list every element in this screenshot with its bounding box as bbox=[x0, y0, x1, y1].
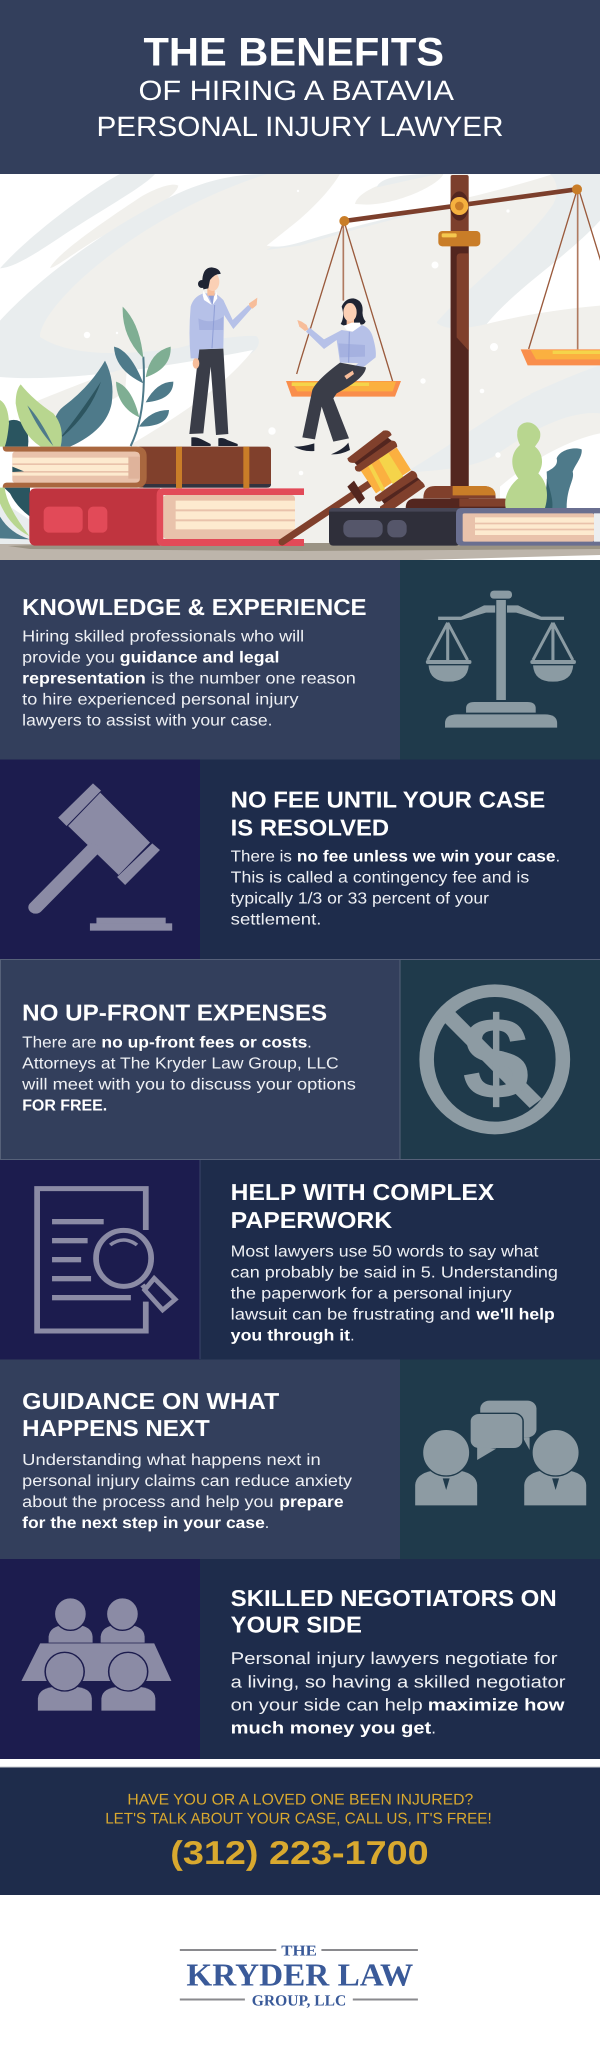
call to action text bbox=[105, 1791, 492, 1827]
body text: There is bbox=[231, 849, 292, 866]
body text bbox=[231, 1244, 558, 1345]
body text: about the process and help you bbox=[22, 1494, 274, 1511]
body text: Understanding what happens next in bbox=[22, 1452, 321, 1469]
body text: settlement. bbox=[231, 912, 321, 929]
body text: . bbox=[307, 1035, 312, 1052]
icon: scales bbox=[426, 591, 576, 728]
icon: negotiation table bbox=[21, 1598, 171, 1711]
logo bbox=[180, 1944, 418, 2009]
book stack: black book bbox=[329, 508, 600, 546]
body text: FOR FREE. bbox=[22, 1098, 107, 1115]
body text: for the next step in your case bbox=[22, 1515, 265, 1532]
body text: Hiring skilled professionals who will bbox=[22, 629, 304, 646]
phone number: (312) 223-1700 bbox=[170, 1834, 429, 1871]
standing woman bbox=[189, 267, 257, 446]
icon: two people talking bbox=[415, 1401, 586, 1505]
heading: YOUR SIDE bbox=[231, 1612, 362, 1638]
body text: . bbox=[265, 1515, 269, 1532]
section 3 panel: no up-front expenses bbox=[0, 960, 600, 1160]
body text: maximize how bbox=[428, 1695, 565, 1714]
illustration: lawyers on books with scales and gavel bbox=[0, 174, 600, 560]
body text: representation bbox=[22, 671, 146, 688]
scales of justice bbox=[297, 175, 600, 500]
heading: KNOWLEDGE & EXPERIENCE bbox=[22, 594, 367, 620]
body text: can probably be said in 5. Understanding bbox=[231, 1265, 558, 1282]
icon: no dollar sign bbox=[427, 991, 563, 1128]
icon: document with magnifier bbox=[37, 1189, 175, 1331]
body text: no fee unless we win your case bbox=[297, 849, 556, 866]
body text: . bbox=[350, 1328, 355, 1345]
body text: is the number one reason bbox=[151, 671, 356, 688]
book stack: brown and red books bbox=[3, 447, 304, 546]
body text: lawyers to assist with your case. bbox=[22, 713, 273, 730]
heading: NO UP-FRONT EXPENSES bbox=[22, 999, 327, 1025]
body text: typically 1/3 or 33 percent of your bbox=[231, 891, 490, 908]
section 4 panel: help with complex paperwork bbox=[0, 1160, 600, 1360]
body text: . bbox=[431, 1718, 436, 1737]
title: PERSONAL INJURY LAWYER bbox=[96, 111, 504, 142]
section 2 panel: no fee until resolved bbox=[0, 760, 600, 960]
body text: This is called a contingency fee and is bbox=[231, 870, 529, 887]
body text bbox=[21, 1035, 356, 1115]
body text bbox=[22, 1452, 352, 1532]
body text: you through it bbox=[231, 1328, 351, 1345]
body text: personal injury claims can reduce anxiety bbox=[22, 1473, 352, 1490]
body text: will meet with you to discuss your options bbox=[21, 1077, 356, 1094]
body text: . bbox=[556, 849, 560, 866]
title: OF HIRING A BATAVIA bbox=[138, 75, 454, 106]
icon: no dollar sign: $ bbox=[462, 993, 529, 1123]
scale base and right plants bbox=[406, 422, 582, 508]
heading bbox=[22, 1388, 279, 1441]
body text bbox=[231, 849, 560, 929]
body text: guidance and legal bbox=[120, 650, 279, 667]
heading: NO FEE UNTIL YOUR CASE bbox=[231, 786, 545, 812]
ground bbox=[0, 543, 600, 560]
body text: Personal injury lawyers negotiate for bbox=[231, 1649, 558, 1668]
body text: much money you get bbox=[231, 1718, 432, 1737]
body text: on your side can help bbox=[231, 1695, 423, 1714]
body text: lawsuit can be frustrating and bbox=[231, 1307, 471, 1324]
heading bbox=[231, 1179, 495, 1233]
section 5 panel: guidance on what happens next bbox=[0, 1360, 600, 1559]
title: THE BENEFITS bbox=[144, 30, 444, 74]
logo: KRYDER LAW bbox=[186, 1957, 413, 1993]
body text: the paperwork for a personal injury bbox=[231, 1286, 512, 1303]
section 1 panel: knowledge and experience bbox=[0, 560, 600, 760]
seated woman on swing pan bbox=[286, 298, 401, 454]
call to action panel bbox=[0, 1766, 600, 1895]
body text: provide you bbox=[22, 650, 115, 667]
title bbox=[96, 30, 504, 142]
icon: gavel bbox=[36, 783, 172, 931]
logo: GROUP, LLC bbox=[252, 1992, 346, 2009]
heading: GUIDANCE ON WHAT bbox=[22, 1388, 279, 1414]
heading: HELP WITH COMPLEX bbox=[231, 1179, 495, 1205]
gavel bbox=[282, 430, 425, 542]
heading: SKILLED NEGOTIATORS ON bbox=[231, 1585, 557, 1611]
body text: to hire experienced personal injury bbox=[22, 692, 298, 709]
body text: Attorneys at The Kryder Law Group, LLC bbox=[22, 1056, 339, 1073]
heading: IS RESOLVED bbox=[231, 814, 389, 840]
heading: HAPPENS NEXT bbox=[22, 1415, 210, 1441]
call to action text: HAVE YOU OR A LOVED ONE BEEN INJURED? bbox=[127, 1791, 474, 1808]
section 6 panel: skilled negotiators bbox=[0, 1559, 600, 1759]
body text: we'll help bbox=[475, 1307, 555, 1324]
body text bbox=[22, 629, 356, 730]
heading: PAPERWORK bbox=[231, 1207, 393, 1233]
logo: THE bbox=[281, 1944, 317, 1960]
header panel bbox=[0, 0, 600, 174]
left plants bbox=[0, 307, 173, 539]
white dots bbox=[84, 190, 510, 475]
body text: prepare bbox=[279, 1494, 344, 1511]
heading bbox=[231, 786, 545, 840]
body text: There are bbox=[22, 1035, 97, 1052]
body text: no up-front fees or costs bbox=[101, 1035, 307, 1052]
body text bbox=[231, 1649, 566, 1737]
body text: a living, so having a skilled negotiator bbox=[231, 1672, 566, 1691]
body text: Most lawyers use 50 words to say what bbox=[231, 1244, 539, 1261]
call to action text: LET'S TALK ABOUT YOUR CASE, CALL US, IT'S FREE! bbox=[105, 1810, 492, 1827]
heading bbox=[231, 1585, 557, 1638]
